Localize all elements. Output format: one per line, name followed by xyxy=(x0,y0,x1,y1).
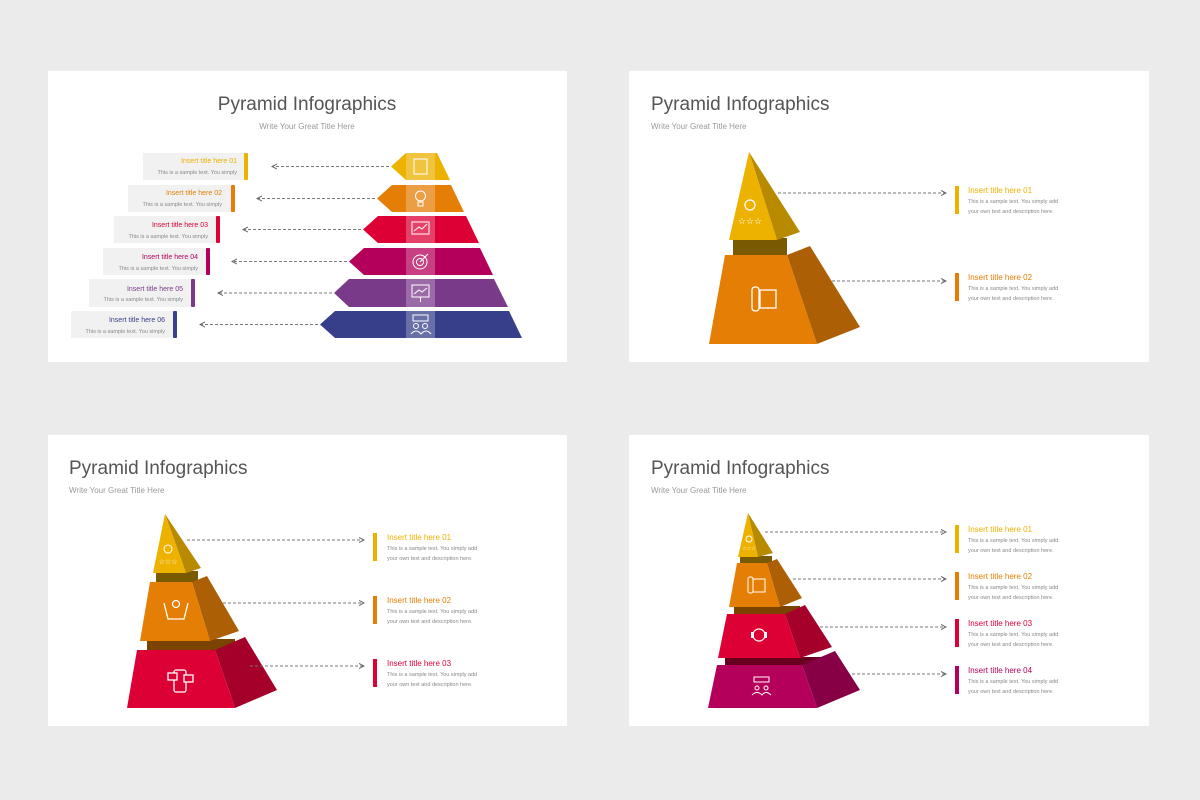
level 1 xyxy=(738,513,773,564)
text block 2: Insert title here 02 xyxy=(387,596,452,605)
level 1: ☆☆☆ xyxy=(159,558,177,566)
text block 1: Insert title here 01 xyxy=(387,533,452,542)
text block 3: This is a sample text. You simply add xyxy=(968,632,1058,638)
level 3 xyxy=(718,605,832,666)
label boxes xyxy=(71,153,248,338)
pyramid level 1 xyxy=(729,152,800,256)
text block 1: your own text and description here. xyxy=(387,556,473,562)
text block 1: This is a sample text. You simply add xyxy=(387,546,477,552)
text block 4 xyxy=(955,666,1058,695)
text block 3: Insert title here 03 xyxy=(968,619,1033,628)
tier 3 xyxy=(363,216,479,243)
panel: six-level pyramid xyxy=(48,71,567,362)
title: Pyramid Infographics xyxy=(218,94,396,115)
level 2 xyxy=(140,576,239,651)
text block 1: your own text and description here. xyxy=(968,548,1054,554)
subtitle: Write Your Great Title Here xyxy=(651,122,747,131)
arrows xyxy=(778,193,946,281)
label boxes: This is a sample text. You simply xyxy=(129,234,208,240)
text block 1 xyxy=(955,186,1058,215)
text block 3 xyxy=(373,659,477,688)
text block 1 xyxy=(373,533,477,562)
text block 2: This is a sample text. You simply add xyxy=(968,585,1058,591)
text block 1 xyxy=(955,525,1058,554)
tier 4 xyxy=(349,248,493,275)
text block 3 xyxy=(955,619,1058,648)
arrows xyxy=(765,532,946,674)
level 1: ☆☆☆ xyxy=(742,546,756,552)
text block 3: your own text and description here. xyxy=(387,682,473,688)
title: Pyramid Infographics xyxy=(651,458,829,479)
title: Pyramid Infographics xyxy=(69,458,247,479)
label boxes: Insert title here 06 xyxy=(109,317,165,324)
tier 2 xyxy=(377,185,464,212)
arrows xyxy=(200,166,389,324)
text block 1: Insert title here 01 xyxy=(968,525,1033,534)
pyramid level 2 xyxy=(709,246,860,344)
label boxes: Insert title here 01 xyxy=(181,158,237,165)
text block 3: your own text and description here. xyxy=(968,642,1054,648)
label boxes: Insert title here 05 xyxy=(127,286,183,293)
text block 3: This is a sample text. You simply add xyxy=(387,672,477,678)
text block 2 xyxy=(955,572,1058,601)
text block 4: Insert title here 04 xyxy=(968,666,1033,675)
pyramid level 1: ☆☆☆ xyxy=(738,216,762,226)
arrows xyxy=(187,540,364,666)
label boxes: This is a sample text. You simply xyxy=(104,297,183,303)
title: Pyramid Infographics xyxy=(651,94,829,115)
text block 2: your own text and description here. xyxy=(968,296,1054,302)
text block 2: Insert title here 02 xyxy=(968,572,1033,581)
tier 5 xyxy=(334,279,508,307)
tier 6 xyxy=(320,311,522,338)
label boxes: This is a sample text. You simply xyxy=(158,170,237,176)
tier 1 xyxy=(391,153,450,180)
text block 3: Insert title here 03 xyxy=(387,659,452,668)
text block 2 xyxy=(373,596,477,625)
panel: four-level pyramid xyxy=(629,435,1149,726)
text block 2 xyxy=(955,273,1058,302)
label boxes: Insert title here 02 xyxy=(166,190,222,197)
text block 1: This is a sample text. You simply add xyxy=(968,199,1058,205)
text block 4: This is a sample text. You simply add xyxy=(968,679,1058,685)
level 1 xyxy=(153,514,201,583)
subtitle: Write Your Great Title Here xyxy=(69,486,165,495)
text block 4: your own text and description here. xyxy=(968,689,1054,695)
level 4 xyxy=(708,651,860,708)
panel: two-level pyramid xyxy=(629,71,1149,362)
label boxes: This is a sample text. You simply xyxy=(143,202,222,208)
text block 2: your own text and description here. xyxy=(387,619,473,625)
label boxes: This is a sample text. You simply xyxy=(119,266,198,272)
text block 2: This is a sample text. You simply add xyxy=(387,609,477,615)
text block 2: Insert title here 02 xyxy=(968,273,1033,282)
level 3 xyxy=(127,637,277,708)
panel: three-level pyramid xyxy=(48,435,567,726)
text block 2: This is a sample text. You simply add xyxy=(968,286,1058,292)
text block 1: your own text and description here. xyxy=(968,209,1054,215)
text block 1: This is a sample text. You simply add xyxy=(968,538,1058,544)
text block 1: Insert title here 01 xyxy=(968,186,1033,195)
subtitle: Write Your Great Title Here xyxy=(651,486,747,495)
label boxes: Insert title here 04 xyxy=(142,254,198,261)
label boxes: Insert title here 03 xyxy=(152,222,208,229)
text block 2: your own text and description here. xyxy=(968,595,1054,601)
level 2 xyxy=(729,559,802,615)
label boxes: This is a sample text. You simply xyxy=(86,329,165,335)
subtitle: Write Your Great Title Here xyxy=(259,122,355,131)
